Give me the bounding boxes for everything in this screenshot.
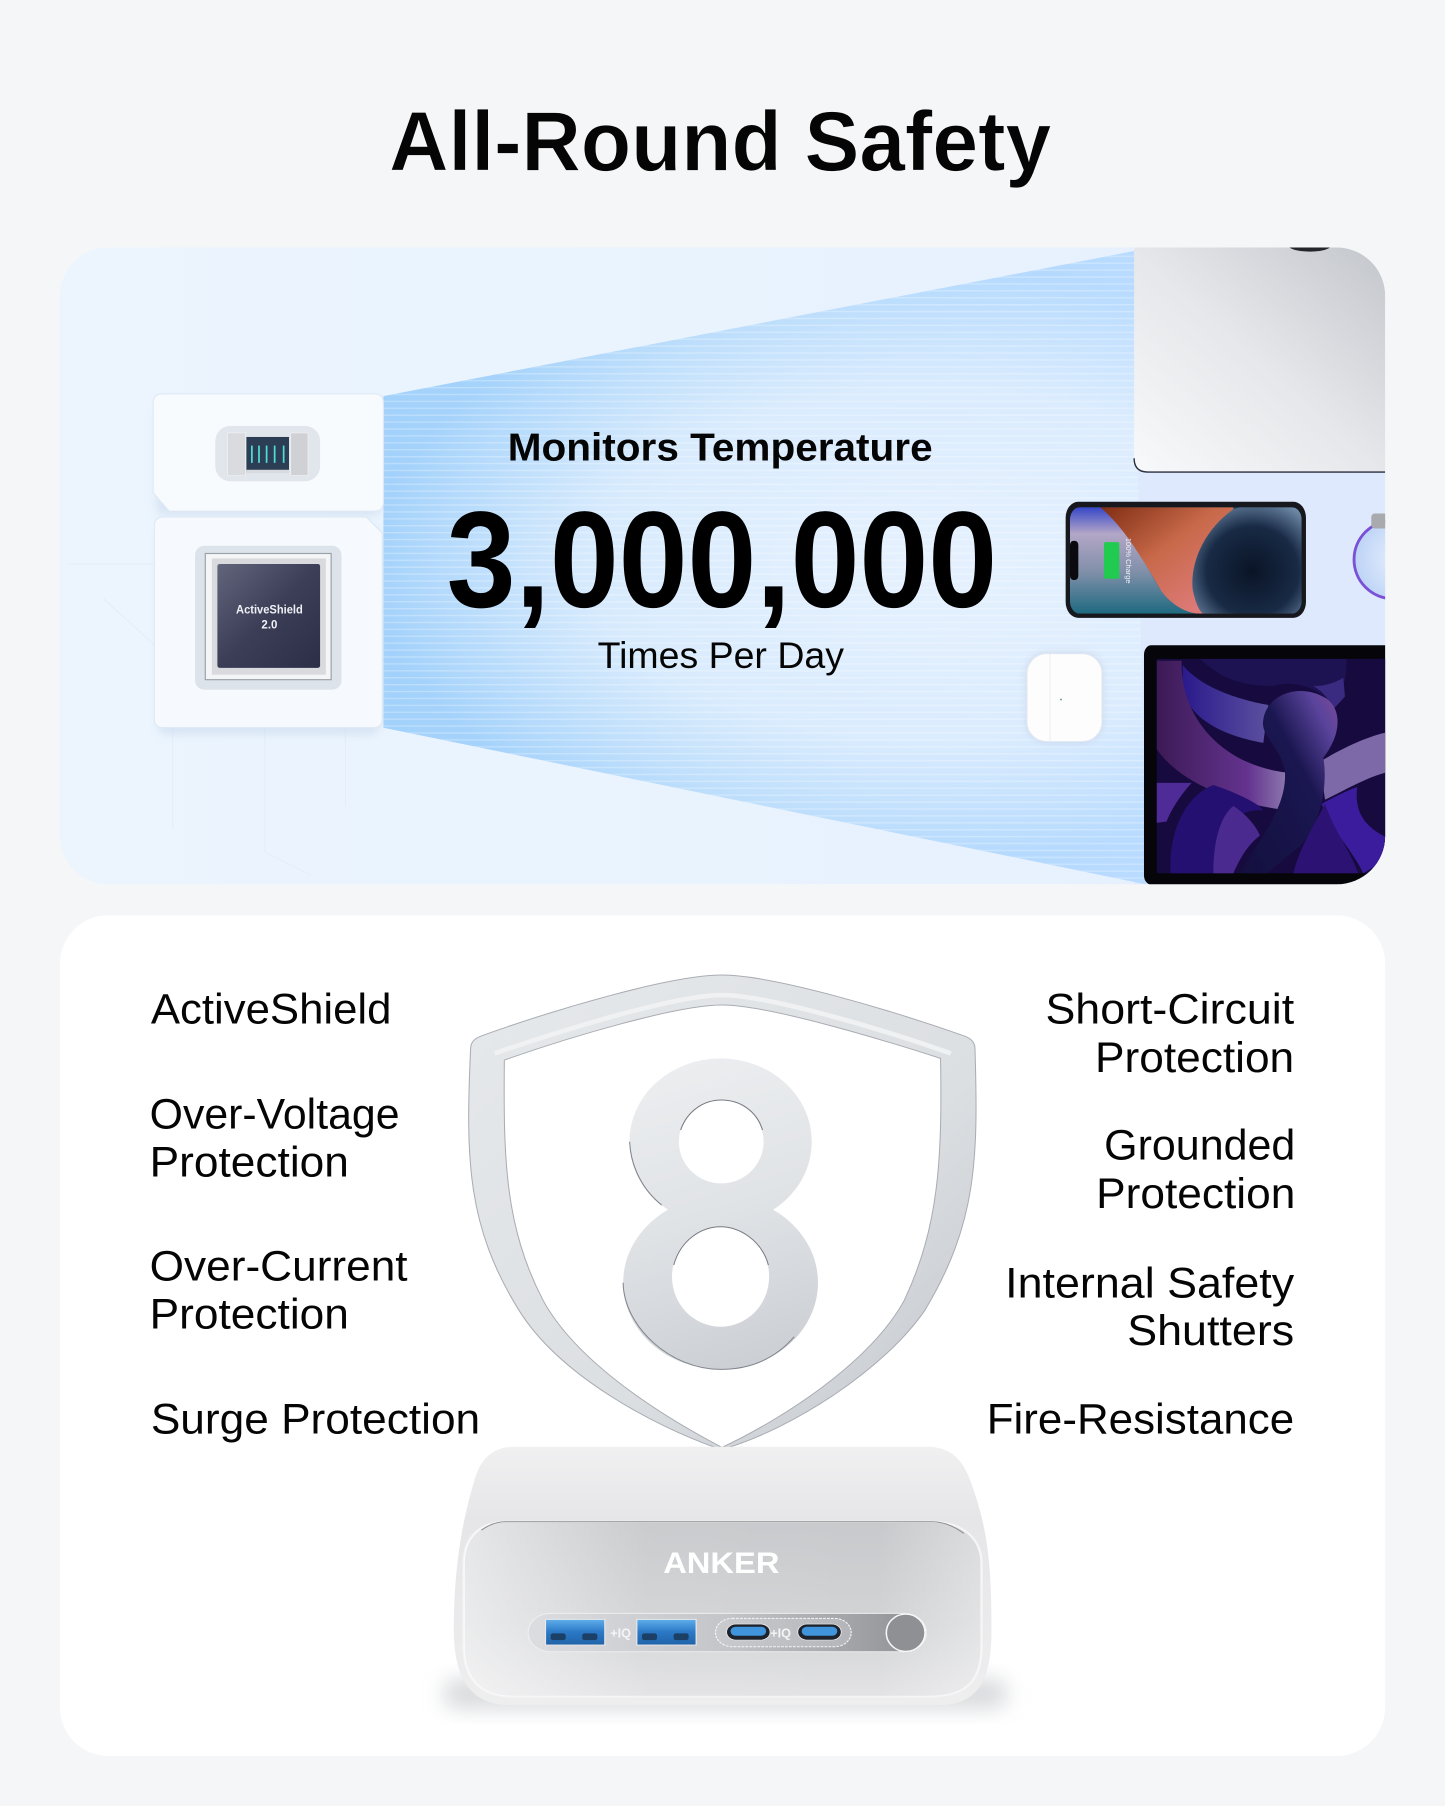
- light beam: [383, 251, 1146, 884]
- number 8: [623, 1058, 818, 1369]
- big number: 3,000,000: [447, 484, 997, 637]
- panel: eight protections: [60, 915, 1385, 1756]
- feature: over-current protection: Over-Current: [150, 1242, 408, 1290]
- chip module: ActiveShield processor card: [154, 517, 382, 735]
- port strip: [528, 1613, 926, 1652]
- device: smartphone: [1066, 502, 1306, 618]
- chip module: temperature sensor card: [153, 394, 383, 516]
- power button: [886, 1614, 925, 1651]
- USB-A port 1: [545, 1619, 605, 1645]
- device: tablet: [1144, 645, 1397, 885]
- phone charge label: 100% Charge: [1124, 538, 1133, 584]
- chip die: [217, 564, 320, 668]
- feature: over-voltage protection: Over-Voltage: [150, 1090, 400, 1138]
- feature: fire-resistance: Fire-Resistance: [987, 1396, 1294, 1444]
- feature: over-current protection: Protection: [150, 1291, 349, 1339]
- feature: grounded protection: Grounded: [1104, 1121, 1295, 1169]
- feature: over-voltage protection: [150, 1090, 400, 1187]
- port label: IQ left: +IQ: [610, 1626, 631, 1640]
- feature: short-circuit protection: Protection: [1095, 1034, 1294, 1082]
- feature: internal safety shutters: [1005, 1260, 1295, 1355]
- charger body: [454, 1447, 991, 1705]
- feature list: left column: [150, 986, 480, 1444]
- title: All-Round Safety: [389, 94, 1051, 188]
- port label: IQ right: +IQ: [770, 1626, 791, 1640]
- feature: grounded protection: Protection: [1096, 1170, 1295, 1218]
- feature: surge protection: Surge Protection: [151, 1396, 480, 1444]
- USB-C group outline: [716, 1618, 851, 1647]
- caption: times per day: Times Per Day: [598, 635, 845, 676]
- product: Anker charging station: [443, 1447, 1007, 1709]
- brand logo: ANKER: [663, 1547, 779, 1580]
- feature list: right column: [987, 986, 1295, 1444]
- feature: short-circuit protection: [1045, 986, 1294, 1082]
- USB-C port 2: [798, 1624, 841, 1640]
- panel: temperature monitoring: [60, 248, 1432, 885]
- feature: ActiveShield: ActiveShield: [151, 986, 391, 1034]
- feature: over-voltage protection: Protection: [150, 1139, 349, 1187]
- feature: short-circuit protection: Short-Circuit: [1045, 986, 1294, 1034]
- icon: shield with number 8: [469, 975, 976, 1447]
- battery icon: [1104, 542, 1119, 579]
- chip die: 2.0: [261, 620, 277, 632]
- USB-C port 1: [727, 1624, 770, 1640]
- device: earbuds case: [1027, 654, 1102, 742]
- USB-A port 2: [637, 1619, 696, 1645]
- front panel: [464, 1522, 982, 1697]
- device: smartwatch: [1352, 514, 1386, 600]
- heading: monitors temperature: Monitors Temperature: [508, 427, 933, 470]
- feature: internal safety shutters: Shutters: [1127, 1307, 1294, 1355]
- feature: internal safety shutters: Internal Safety: [1005, 1260, 1295, 1308]
- feature: grounded protection: [1096, 1121, 1295, 1218]
- device: laptop: [1134, 248, 1385, 472]
- feature: over-current protection: [150, 1242, 408, 1339]
- chip die: ActiveShield: [236, 605, 303, 617]
